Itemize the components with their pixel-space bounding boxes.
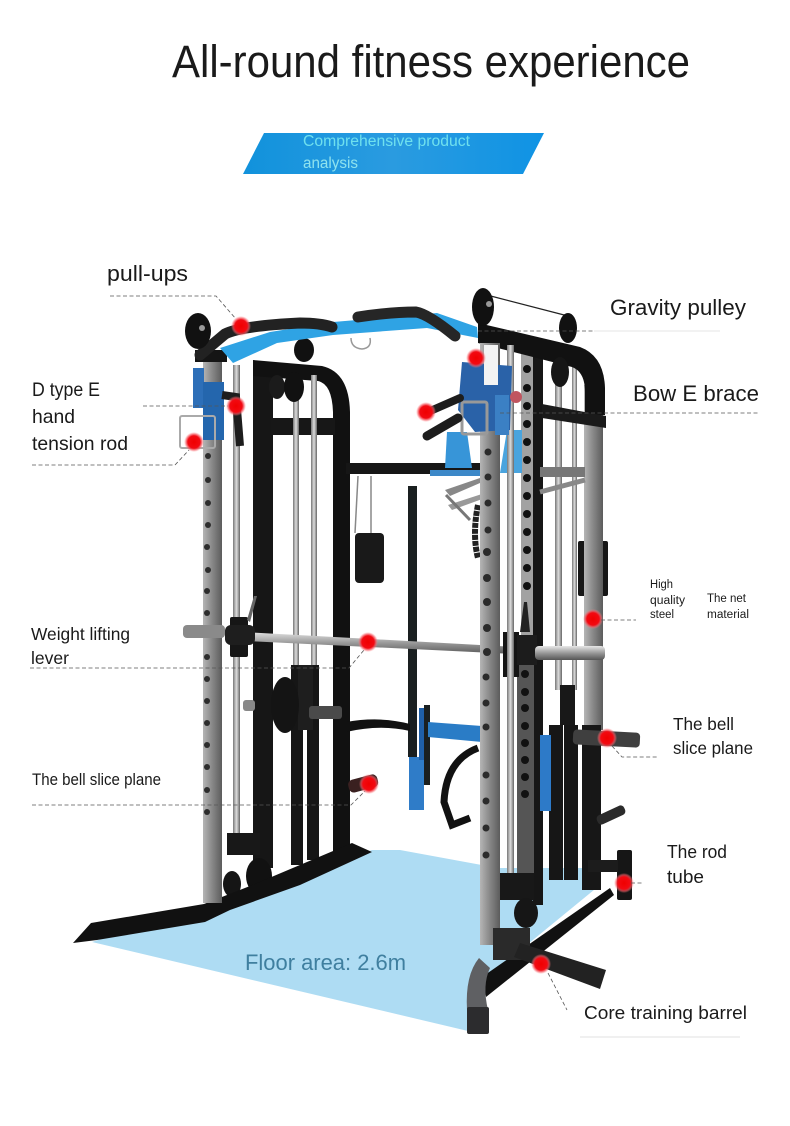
- rear uprights, right side: [499, 345, 578, 928]
- label: the rod tube: The rod: [667, 841, 727, 862]
- label: D type E hand tension rod: [32, 379, 128, 455]
- right front upright: [480, 343, 514, 945]
- lower centre arc and blue stand: [346, 705, 482, 810]
- label: weight lifting lever: [31, 624, 130, 668]
- left foot rail: [73, 843, 372, 943]
- left rear frame: [223, 338, 350, 897]
- label: the net material: The net: [707, 593, 747, 605]
- label: high quality steel: quality: [650, 595, 685, 607]
- hanging weight pad: [355, 476, 384, 583]
- label: D type E hand tension rod: tension rod: [32, 433, 128, 455]
- right pulley bracket: [427, 345, 522, 436]
- red markers: [184, 316, 634, 974]
- label: the bell slice plane, right: [673, 714, 753, 758]
- smith bar: [183, 596, 605, 677]
- label: the rod tube: [667, 841, 727, 887]
- leader lines: [30, 296, 759, 1037]
- right lower pegs: [573, 729, 640, 900]
- top pull-up bars: [185, 312, 478, 363]
- label: high quality steel: [650, 579, 685, 621]
- title: All-round fitness experience: [172, 36, 690, 87]
- label: the bell slice plane, left: The bell slice plane: [32, 771, 161, 789]
- banner: comprehensive product analysis: [243, 133, 544, 174]
- left front upright: [203, 360, 222, 903]
- right base foot: [467, 958, 490, 1034]
- right base rail: [482, 888, 614, 997]
- label: the net material: material: [707, 609, 749, 621]
- left plate peg: [347, 773, 379, 794]
- label: bow E brace: Bow E brace: [633, 381, 759, 406]
- label: the rod tube: tube: [667, 866, 704, 887]
- left pulley bracket: [180, 368, 240, 448]
- label: D type E hand tension rod: hand: [32, 406, 75, 428]
- label: D type E hand tension rod: D type E: [32, 379, 100, 401]
- floor area: Floor area: 2.6m: [245, 950, 406, 975]
- label: the bell slice plane, right: The bell: [673, 714, 734, 734]
- label: high quality steel: High: [650, 579, 673, 591]
- centre black lat bar: [408, 486, 417, 757]
- core training barrel: [493, 928, 606, 989]
- strap handle: [444, 748, 478, 825]
- banner: comprehensive product analysis: analysis: [303, 155, 358, 172]
- centre pulley crossbar with blue stand: [346, 430, 585, 558]
- banner: comprehensive product analysis: Comprehensive product: [303, 133, 471, 150]
- label: pull-ups: pull-ups: [107, 261, 188, 286]
- label: weight lifting lever: Weight lifting: [31, 624, 130, 644]
- label: gravity pulley: Gravity pulley: [610, 295, 746, 320]
- floor area: [92, 850, 600, 1032]
- label: high quality steel: steel: [650, 609, 674, 621]
- plate holder: [243, 677, 342, 733]
- right rear post and top frame: [472, 288, 608, 890]
- label: weight lifting lever: lever: [31, 648, 69, 668]
- label: core training barrel: Core training barrel: [584, 1002, 747, 1023]
- label: the net material: [707, 593, 749, 621]
- gym machine: [73, 288, 640, 1034]
- label: the bell slice plane, right: slice plane: [673, 738, 753, 758]
